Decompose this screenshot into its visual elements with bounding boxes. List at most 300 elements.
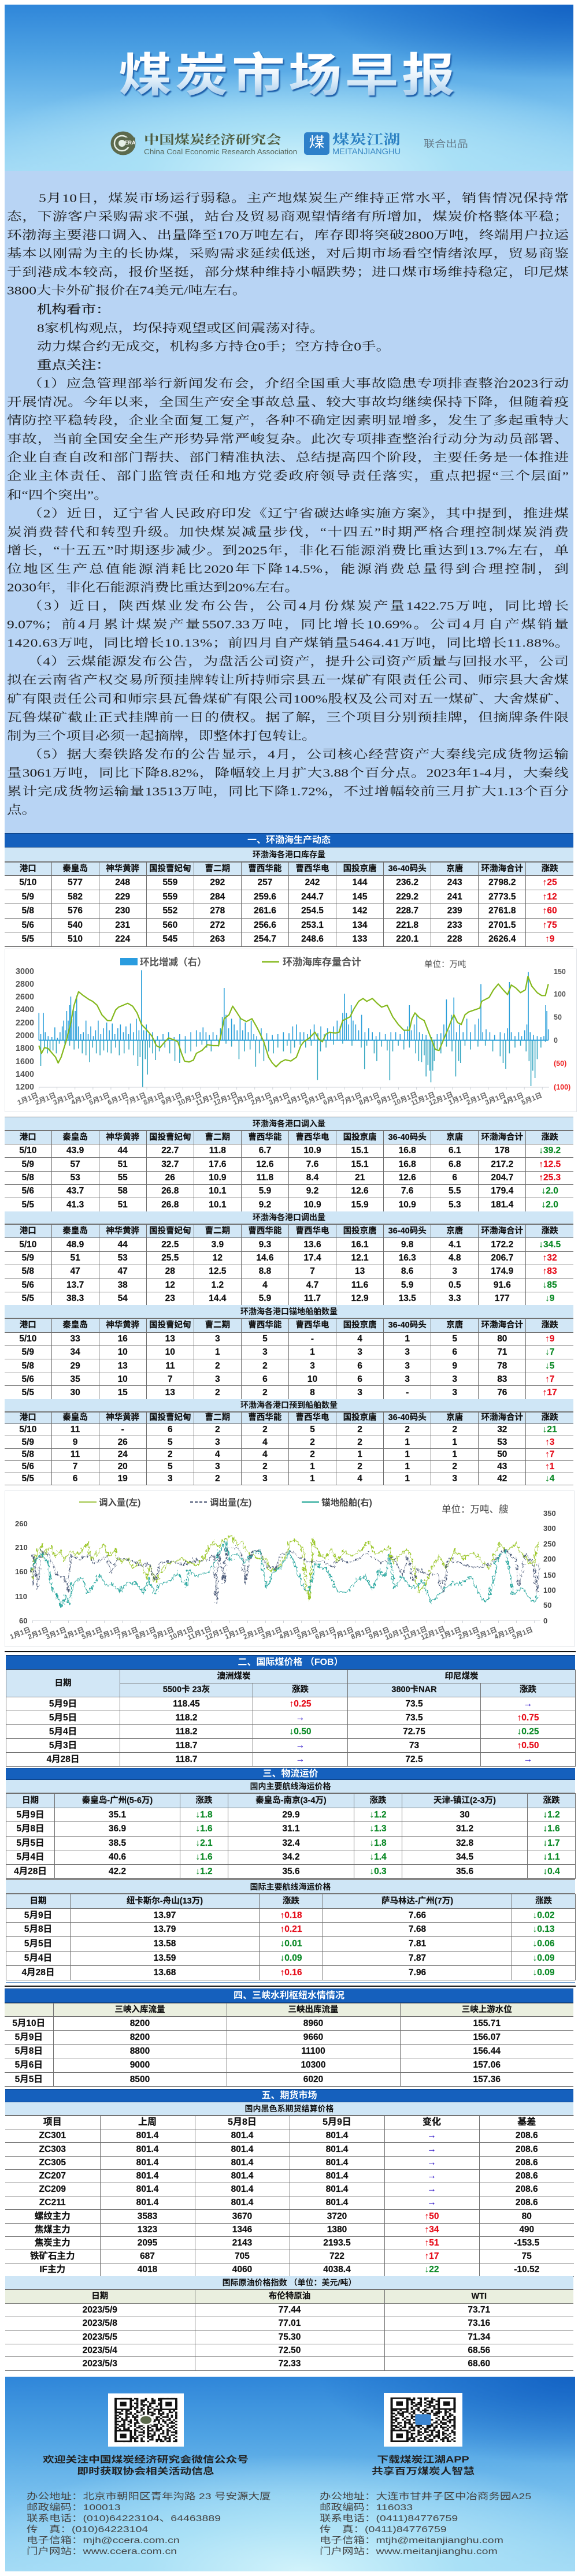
- table: outbound: 4.8: [449, 1253, 461, 1263]
- chart: Bohai stock total and daily change: [5, 949, 577, 1112]
- table: anchored ships: 5: [262, 1334, 268, 1344]
- date labels: 5月1日: [303, 1091, 327, 1106]
- text block: commentary lines: 增长，“十五五”时期逐步减少。到2025年，非化石能源消费比重达到13.7%左右，单: [7, 544, 569, 557]
- table: domestic freight: 5月5日: [16, 1838, 45, 1848]
- table: ferrous futures: 801.4: [231, 2198, 253, 2207]
- sub-heading: expected ships: [5, 1399, 573, 1412]
- table: port stocks: 国投京唐: [343, 864, 377, 873]
- table: port stocks: 254.7: [254, 934, 276, 944]
- table: inbound: 58: [118, 1186, 128, 1196]
- table: expected ships: 涨跌: [542, 1413, 558, 1422]
- date labels: 9月1日: [376, 1091, 399, 1106]
- table: expected ships: ↑3: [545, 1437, 554, 1447]
- table: Three Gorges water: 155.71: [473, 2019, 501, 2028]
- table: domestic freight: 31.2: [456, 1824, 473, 1834]
- table: outbound: 7: [310, 1266, 315, 1276]
- table: inbound: 曹西华电: [296, 1133, 329, 1142]
- table: port stocks: 5/8: [22, 906, 34, 916]
- panel: port flow and ship tables: [5, 1117, 573, 1485]
- sub-heading: expected ships: 环渤海各港口预到船舶数量: [240, 1400, 338, 1410]
- table: inbound: 神华黄骅: [106, 1133, 139, 1142]
- table: international coal prices: →: [524, 1754, 532, 1764]
- QR code: association WeChat: [108, 2393, 184, 2447]
- table: expected ships: 2: [405, 1425, 410, 1434]
- table: ferrous futures: ↓22: [424, 2265, 439, 2274]
- table: ferrous futures: →: [427, 2184, 436, 2194]
- contact details: Meitanjianghu: 电子信箱：mtjh@meitanjianghu.com: [320, 2536, 503, 2545]
- table: port stocks: 港口: [20, 864, 36, 873]
- table: Three Gorges water: 8960: [303, 2019, 323, 2028]
- table: expected ships: 26: [118, 1437, 128, 1447]
- heading: section 5: 五、期货市场: [261, 2091, 317, 2101]
- table: crude oil: 73.71: [468, 2305, 490, 2315]
- table: port stocks: 228: [447, 934, 462, 944]
- left axis: 3000: [16, 967, 34, 976]
- table: expected ships: 42: [497, 1474, 507, 1484]
- table: inbound: 16.8: [399, 1159, 416, 1169]
- table: anchored ships: ↑7: [545, 1374, 554, 1384]
- table: port stocks: 261.6: [254, 906, 276, 916]
- table: domestic freight: 34.5: [456, 1852, 473, 1862]
- date labels: 5月1日: [296, 1626, 319, 1641]
- table: Three Gorges water: 10300: [301, 2060, 326, 2070]
- table: outbound: 5/5: [22, 1293, 34, 1303]
- contact details: association: 联系电话：(010)64223104、64463889: [27, 2514, 221, 2523]
- date labels: 9月1日: [152, 1626, 175, 1641]
- table: Three Gorges water: 三峡上游水位: [462, 2005, 512, 2014]
- table: port stocks: 5/6: [22, 920, 34, 930]
- table: anchored ships: 6: [357, 1361, 362, 1371]
- table: anchored ships: 3: [452, 1374, 457, 1384]
- table: Three Gorges water: 9000: [130, 2060, 150, 2070]
- table: international freight: 5月5日: [24, 1939, 52, 1949]
- date labels: 7月1日: [124, 1091, 147, 1106]
- text block: commentary lines: 和“四个突出”。: [7, 488, 109, 501]
- table: expected ships: 9: [73, 1437, 77, 1447]
- date labels: 2月1日: [250, 1091, 273, 1106]
- table: expected ships: 32: [497, 1425, 507, 1434]
- table: port stocks: 2798.2: [488, 878, 516, 887]
- table: international freight: 5月4日: [24, 1953, 52, 1963]
- table: Three Gorges water: 157.06: [473, 2060, 501, 2070]
- table: ferrous futures: ZC207: [39, 2171, 66, 2181]
- date labels: 6月1日: [322, 1091, 345, 1106]
- table: international freight: 13.59: [154, 1953, 176, 1963]
- sub-heading: outbound: 环渤海各港口调出量: [253, 1213, 325, 1222]
- table: crude oil: 2023/5/8: [83, 2318, 117, 2328]
- table: anchored ships: 2: [262, 1388, 268, 1397]
- date labels: 12月1日: [212, 1090, 239, 1107]
- panel: section 4 Three Gorges water: [5, 1988, 573, 2087]
- table: expected ships: 5/8: [22, 1449, 34, 1459]
- table: expected ships: 4: [262, 1437, 268, 1447]
- date labels: 4月1日: [62, 1626, 86, 1641]
- text block: commentary lines: 2030年，非化石能源消费比重达到20%左右。: [7, 581, 299, 594]
- date labels: 11月1日: [402, 1625, 428, 1642]
- table: ferrous futures: 801.4: [326, 2158, 348, 2168]
- table: international coal prices: 73: [409, 1741, 419, 1750]
- date labels: 11月1日: [194, 1090, 221, 1107]
- table: expected ships: 20: [118, 1462, 128, 1471]
- left axis: [15, 1519, 28, 1625]
- panel: masthead banner: [5, 5, 573, 171]
- table: outbound: 12.9: [351, 1293, 369, 1303]
- table: expected ships: 1: [310, 1474, 315, 1484]
- table: inbound: 17.6: [209, 1159, 226, 1169]
- table: port stocks: 142: [353, 906, 368, 916]
- table: outbound: 172.2: [491, 1240, 513, 1250]
- left axis: 60: [19, 1616, 27, 1625]
- table: ferrous futures: 801.4: [136, 2158, 158, 2168]
- table: international freight: 5月9日: [24, 1910, 52, 1920]
- table: domestic freight: ↓1.1: [543, 1852, 560, 1862]
- table: port stocks: 134: [353, 920, 368, 930]
- table: anchored ships: 10: [118, 1374, 128, 1384]
- date labels: 3月1日: [45, 1626, 68, 1641]
- table: anchored ships: 5: [452, 1334, 457, 1344]
- table: expected ships: 1: [405, 1462, 410, 1471]
- date labels: 10月1日: [384, 1625, 410, 1642]
- table: inbound: 43.7: [66, 1186, 84, 1196]
- table: inbound: 11.8: [257, 1173, 273, 1183]
- date labels: 1月1日: [232, 1091, 255, 1106]
- table: outbound: 5/10: [19, 1240, 36, 1250]
- date labels: 5月1日: [511, 1626, 534, 1641]
- panel: footer contact banner: [5, 2377, 575, 2571]
- table: domestic freight: 31.1: [282, 1824, 300, 1834]
- table: anchored ships: 9: [452, 1361, 457, 1371]
- table: expected ships: 5/5: [22, 1474, 34, 1484]
- table: inbound: 曹二期: [205, 1133, 230, 1142]
- table: ferrous futures: 变化: [423, 2117, 441, 2127]
- table: anchored ships: 2: [262, 1361, 268, 1371]
- date labels: [9, 1625, 534, 1642]
- panel: section 2 international coal prices: [6, 1655, 576, 1767]
- left axis: 1800: [16, 1044, 34, 1053]
- text block: commentary lines: （1）应急管理部举行新闻发布会，介绍全国重大事故隐患专项排查整治2023行动: [28, 377, 569, 390]
- table: port stocks: 2626.4: [488, 934, 516, 944]
- sub-heading: domestic freight: [6, 1780, 575, 1793]
- table: international freight: 7.87: [409, 1953, 426, 1963]
- table: inbound: 6.7: [259, 1146, 271, 1155]
- table: crude oil: 68.60: [468, 2359, 490, 2369]
- table: port stocks: 272: [210, 920, 225, 930]
- table: international coal prices: →: [296, 1713, 305, 1723]
- table: inbound: 10.1: [209, 1200, 226, 1210]
- legend: inflow: 调入量(左): [99, 1497, 140, 1508]
- table: port stocks: 曹西华能: [248, 864, 281, 873]
- logo: China Coal Economic Research Association: ERA: [124, 140, 136, 146]
- table: anchored ships: 6: [357, 1374, 362, 1384]
- table: anchored ships: 29: [70, 1361, 80, 1371]
- table: anchored ships: 环渤海合计: [481, 1321, 523, 1330]
- table: expected ships: 京唐: [446, 1413, 463, 1422]
- table: port stocks: 144: [353, 878, 368, 887]
- table: outbound: 28: [165, 1266, 175, 1276]
- right axis: [554, 968, 570, 1091]
- table: international freight: 4月28日: [22, 1968, 54, 1977]
- table: port stocks: 229.2: [396, 892, 418, 902]
- date labels: 9月1日: [160, 1091, 183, 1106]
- right axis: (50): [554, 1060, 566, 1068]
- table: Three Gorges water: 9660: [303, 2032, 323, 2042]
- table: international coal prices: 5月3日: [49, 1741, 77, 1750]
- table: international coal prices: →: [296, 1754, 305, 1764]
- table: anchored ships: 5/9: [22, 1347, 34, 1357]
- table: domestic freight: 29.9: [282, 1810, 300, 1820]
- table: crude oil: 73.16: [468, 2318, 490, 2328]
- table: ferrous futures: 801.4: [326, 2131, 348, 2140]
- table: outbound: 4.1: [449, 1240, 461, 1250]
- table: inbound: 5.3: [449, 1200, 461, 1210]
- table: domestic freight: 38.5: [109, 1838, 126, 1848]
- sub-heading: inbound: [5, 1117, 573, 1131]
- table: outbound: ↑32: [543, 1253, 557, 1263]
- date labels: 8月1日: [142, 1091, 165, 1106]
- table: port stocks: 256.6: [254, 920, 276, 930]
- sub-heading: port stocks: [5, 847, 573, 862]
- table: crude oil: 2023/5/4: [83, 2345, 117, 2355]
- table: outbound: 36-40码头: [388, 1226, 427, 1236]
- table: anchored ships: 秦皇岛: [62, 1321, 88, 1330]
- table: anchored ships: ↓5: [545, 1361, 554, 1371]
- table: ferrous futures: 上周: [138, 2117, 157, 2127]
- date labels: 10月1日: [176, 1090, 203, 1107]
- table: expected ships: 神华黄骅: [106, 1413, 139, 1422]
- table: expected ships: 国投曹妃甸: [149, 1413, 191, 1422]
- table: anchored ships: 3: [262, 1347, 268, 1357]
- table: port stocks: 243: [447, 878, 462, 887]
- table: outbound: ↑83: [543, 1266, 557, 1276]
- table: port stocks: 2761.8: [488, 906, 516, 916]
- table: inbound: 15.1: [351, 1146, 369, 1155]
- table: port stocks: 京唐: [446, 864, 463, 873]
- table: expected ships: 1: [452, 1449, 457, 1459]
- table: crude oil: 77.01: [279, 2318, 301, 2328]
- panel: section 3 freight rates: [6, 1768, 576, 1980]
- table: inbound: 12.6: [351, 1186, 369, 1196]
- table: anchored ships: 5/5: [22, 1388, 34, 1397]
- text block: commentary lines: 3800大卡外矿报价在74美元/吨左右。: [7, 284, 247, 298]
- table: crude oil: 布伦特原油: [269, 2292, 310, 2301]
- date labels: 5月1日: [520, 1091, 543, 1106]
- table: domestic freight: ↓2.1: [195, 1838, 213, 1848]
- panel: section 5 futures: [5, 2089, 574, 2371]
- table: port stocks: 552: [162, 906, 177, 916]
- text block: commentary lines: （5）据大秦铁路发布的公告显示，4月，公司核心经营资产大秦线完成货物运输: [28, 748, 569, 761]
- table: port stocks: 涨跌: [542, 864, 558, 873]
- table: inbound: 6.1: [449, 1146, 461, 1155]
- table: port stocks: 257: [257, 878, 272, 887]
- table: expected ships: 11: [71, 1449, 80, 1459]
- table: anchored ships: 京唐: [446, 1321, 463, 1330]
- legend: outflow: 调出量(左): [210, 1497, 251, 1508]
- table: inbound: 22.7: [161, 1146, 179, 1155]
- table: outbound: 12: [165, 1280, 175, 1290]
- table: outbound: 5/8: [22, 1266, 34, 1276]
- table: Three Gorges water: 6020: [303, 2075, 323, 2084]
- date labels: 7月1日: [340, 1091, 363, 1106]
- table: ferrous futures: →: [427, 2131, 436, 2140]
- table: expected ships: ↑7: [545, 1449, 554, 1459]
- table: outbound: 5/9: [22, 1253, 34, 1263]
- table: port stocks: 582: [68, 892, 83, 902]
- table: port stocks: 231: [115, 920, 130, 930]
- table: anchored ships: ↑9: [545, 1334, 554, 1344]
- table: domestic freight: 涨跌: [543, 1796, 560, 1805]
- date labels: 8月1日: [134, 1626, 157, 1641]
- table: port stocks: 559: [162, 878, 177, 887]
- table: international coal prices: 118.45: [173, 1699, 200, 1709]
- table: expected ships: ↑1: [545, 1462, 554, 1471]
- text block: commentary lines: 机构看市：: [37, 303, 111, 316]
- table: domestic freight: 5月8日: [16, 1824, 45, 1834]
- table: inbound: 6: [452, 1173, 457, 1183]
- table: international freight: 纽卡斯尔-舟山(13万): [127, 1897, 203, 1906]
- logo: Meitanjianghu: [304, 132, 329, 155]
- table: port stocks: 540: [68, 920, 83, 930]
- table: expected ships: 4: [357, 1474, 362, 1484]
- table: crude oil: 75.30: [279, 2332, 301, 2342]
- contact details: association: 办公地址：北京市朝阳区青年沟路 23 号安源大厦: [27, 2492, 271, 2501]
- table: outbound: 51: [70, 1253, 80, 1263]
- caption: app line 1: 下载煤炭江湖APP: [377, 2455, 469, 2465]
- table: domestic freight: 42.2: [109, 1867, 126, 1876]
- right axis: 150: [554, 968, 566, 976]
- table: outbound: 14.4: [209, 1293, 226, 1303]
- table: inbound: ↑25.3: [539, 1173, 561, 1183]
- table: inbound: 51: [118, 1200, 128, 1210]
- table: expected ships: 2: [262, 1462, 268, 1471]
- legend: change bars: 环比增减（右）: [140, 957, 207, 968]
- table: ferrous futures: 801.4: [231, 2144, 253, 2154]
- table: expected ships: 3: [215, 1462, 220, 1471]
- contact details: association: 电子信箱：mjh@ccera.com.cn: [27, 2536, 180, 2545]
- table: international freight: ↑0.21: [280, 1924, 302, 1934]
- table: anchored ships: 5/8: [22, 1361, 34, 1371]
- date labels: 6月1日: [314, 1626, 337, 1641]
- table: international coal prices: 5月9日: [49, 1699, 77, 1709]
- table: ferrous futures: 801.4: [231, 2158, 253, 2168]
- table: anchored ships: 10: [118, 1347, 128, 1357]
- panel: section 1 stock table: [5, 833, 573, 947]
- table: outbound: 12.5: [209, 1266, 226, 1276]
- table: international coal prices: ↓0.50: [290, 1727, 311, 1737]
- date labels: 1月1日: [9, 1626, 32, 1641]
- table: Three Gorges water: 8500: [130, 2075, 150, 2084]
- table: Three Gorges water: 156.07: [473, 2032, 501, 2042]
- table: inbound: 41.3: [66, 1200, 84, 1210]
- table: port stocks: 577: [68, 878, 83, 887]
- table: inbound: 55: [118, 1173, 128, 1183]
- table: crude oil: 72.50: [279, 2345, 301, 2355]
- organisation name: Chinese: 中国煤炭经济研究会: [144, 133, 281, 147]
- table: inbound: 5.5: [449, 1186, 461, 1196]
- text block: commentary lines: 拟在云南省产权交易所预挂牌转让所持师宗县五一煤矿有限责任公司、师宗县大舍煤: [7, 673, 569, 687]
- table: expected ships: 6: [168, 1425, 173, 1434]
- date labels: 1月1日: [439, 1626, 462, 1641]
- heading: section 3: [6, 1768, 575, 1780]
- table: ferrous futures: 208.6: [516, 2198, 538, 2207]
- contact details: Meitanjianghu: 办公地址：大连市甘井子区中冶商务园A25: [320, 2492, 531, 2501]
- table: inbound: 11.8: [209, 1146, 226, 1155]
- table: inbound: [5, 1131, 573, 1211]
- table: outbound: 12: [213, 1253, 223, 1263]
- table: crude oil: [5, 2289, 573, 2371]
- heading: section 5: [5, 2089, 573, 2102]
- table: expected ships: 5: [310, 1425, 315, 1434]
- table: Three Gorges water: 11100: [301, 2046, 325, 2056]
- table: domestic freight: ↓1.6: [543, 1824, 560, 1834]
- table: port stocks: 254.5: [301, 906, 324, 916]
- table: anchored ships: 15: [118, 1388, 128, 1397]
- table: port stocks: 曹西华电: [296, 864, 329, 873]
- table: expected ships: 2: [168, 1449, 173, 1459]
- table: ferrous futures: 801.4: [136, 2198, 158, 2207]
- table: outbound: 港口: [20, 1226, 36, 1236]
- table: anchored ships: 3: [452, 1388, 457, 1397]
- table: anchored ships: 76: [497, 1388, 507, 1397]
- table: crude oil: 71.34: [468, 2332, 490, 2342]
- table: expected ships: 36-40码头: [388, 1413, 427, 1422]
- table: expected ships: 2: [215, 1425, 220, 1434]
- text block: commentary lines: 开展情况。今年以来，全国生产安全事故总量、较大事故均继续保持下降，但随着疫: [7, 395, 569, 408]
- table: expected ships: 曹二期: [205, 1413, 230, 1422]
- table: anchored ships: 2: [215, 1388, 220, 1397]
- table: port stocks: 220.1: [396, 934, 418, 944]
- table: international coal prices: ↑0.50: [517, 1741, 539, 1750]
- table: outbound: 174.9: [491, 1266, 513, 1276]
- table: ferrous futures: 4060: [232, 2265, 252, 2274]
- contact details: association: 传 真：(010)64223104: [27, 2525, 148, 2534]
- table: domestic freight: 35.6: [456, 1867, 473, 1876]
- table: expected ships: 2: [357, 1425, 362, 1434]
- table: ferrous futures: 基差: [517, 2117, 536, 2127]
- table: ferrous futures: 5月8日: [228, 2117, 257, 2127]
- table: inbound: ↓2.0: [542, 1200, 558, 1210]
- table: Three Gorges water: 三峡出库流量: [288, 2005, 339, 2014]
- table: ferrous futures: 2095: [138, 2238, 157, 2248]
- table: anchored ships: 5/6: [22, 1374, 34, 1384]
- table: ferrous futures: ZC303: [39, 2144, 66, 2154]
- sub-heading: ferrous futures: [5, 2102, 573, 2116]
- table: outbound: 1.2: [212, 1280, 224, 1290]
- table: international coal prices: 4月28日: [47, 1754, 79, 1764]
- text block: commentary lines: 环渤海主要港口调入、出量降至170万吨左右，库存即将突破2800万吨，终端用户拉运: [7, 228, 569, 241]
- table: anchored ships: 30: [70, 1388, 80, 1397]
- sub-heading: international freight: 国际主要航线海运价格: [250, 1882, 331, 1891]
- table: international freight: ↓0.09: [533, 1953, 554, 1963]
- table: inbound: 51: [118, 1159, 128, 1169]
- table: anchored ships: 2: [215, 1361, 220, 1371]
- table: ferrous futures: 1346: [232, 2225, 252, 2235]
- brand name: MEITANJIANGHU: MEITANJIANGHU: [332, 147, 401, 157]
- table: international coal prices: 118.2: [176, 1713, 197, 1723]
- table: ferrous futures: 螺纹主力: [35, 2211, 71, 2221]
- table: outbound: 4.7: [306, 1280, 318, 1290]
- table: ferrous futures: ZC209: [39, 2184, 66, 2194]
- table: outbound: 9.3: [259, 1240, 271, 1250]
- table: international coal prices: 72.5: [405, 1754, 423, 1764]
- table: ferrous futures: 75: [522, 2251, 532, 2261]
- text block: commentary lines: 于到港成本较高，报价坚挺，部分煤种维持小幅跌势；进口煤市场维持稳定，印尼煤: [7, 265, 569, 279]
- table: international freight: ↑0.16: [280, 1968, 302, 1977]
- date labels: 8月1日: [350, 1626, 373, 1641]
- table: expected ships: 2: [310, 1437, 315, 1447]
- chart: inflow, outflow and anchored ships: [5, 1490, 575, 1647]
- table: port stocks: 263: [210, 934, 225, 944]
- table: inbound: 国投京唐: [343, 1133, 377, 1142]
